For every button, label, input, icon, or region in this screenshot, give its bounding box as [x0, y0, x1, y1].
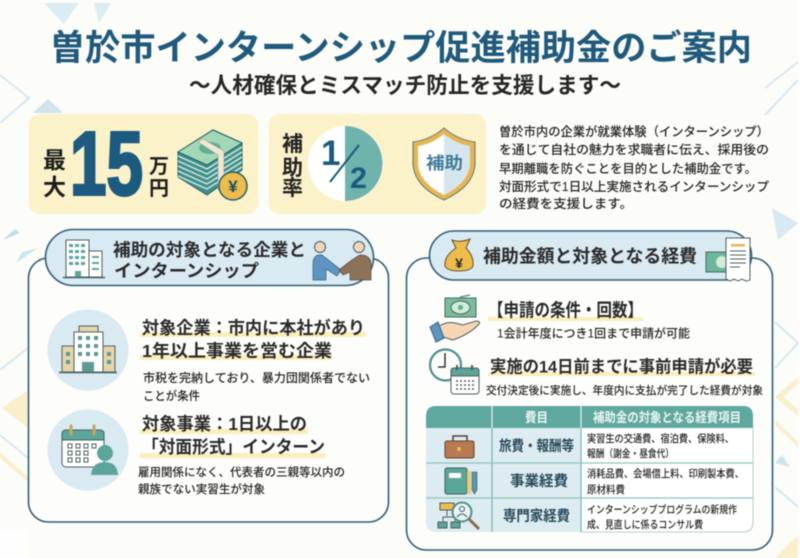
row: travel and fees: 報酬（謝金・昼食代） — [587, 447, 674, 460]
heading: 実施の14日前までに事前申請が必要 — [490, 356, 753, 376]
label: maximum — [43, 147, 66, 200]
label: maximum: 最 — [43, 147, 66, 173]
description: 雇用関係になく、代表者の三親等以内の — [138, 465, 345, 479]
description: 1会計年度につき1回まで申請が可能 — [497, 326, 690, 340]
label: maximum: 大 — [43, 174, 66, 200]
icon: banknote and receipt — [706, 238, 750, 281]
row: expert costs: 専門家経費 — [503, 507, 570, 525]
header text: 補助金額と対象となる経費 — [483, 246, 697, 266]
table: eligible expense items — [426, 406, 753, 532]
heading: 【申請の条件・回数】 — [488, 300, 643, 320]
item: eligible project — [48, 410, 345, 496]
row: project costs: 事業経費 — [510, 472, 568, 490]
chart: one half pie: 1 — [321, 134, 340, 173]
icon: money bag — [445, 239, 473, 271]
item: advance application — [430, 350, 763, 397]
chart: one half pie — [308, 126, 383, 201]
header pill — [430, 231, 752, 281]
text block: overview: を通じて自社の魅力を求職者に伝え、採用後の — [499, 142, 769, 157]
chart: one half pie: 2 — [350, 162, 367, 195]
icon: company building in circle — [48, 310, 128, 390]
icon: shield: 補助 — [426, 154, 463, 173]
icon: banknote over hand — [430, 295, 480, 342]
icon: money stack with yen coin — [178, 130, 247, 200]
unit: man-yen: 万 — [149, 156, 169, 178]
row: travel and fees — [445, 432, 734, 460]
item: eligible project: 「対面形式」インターン — [142, 437, 325, 457]
figure: 15: 15 — [70, 114, 143, 214]
subtitle: 〜人材確保とミスマッチ防止を支援します〜 — [189, 73, 621, 98]
item: application conditions — [430, 295, 690, 342]
row: project costs: 消耗品費、会場借上料、印刷製本費、 — [587, 467, 744, 480]
text block: overview — [499, 124, 770, 211]
row: travel and fees: 旅費・報酬等 — [499, 437, 574, 455]
panel: eligible companies and internships — [28, 230, 388, 522]
heading: 対象事業：1日以上の — [142, 414, 307, 434]
text block: overview: 対面形式で1日以上実施されるインターンシップ — [499, 179, 770, 194]
item: eligible company: 1年以上事業を営む企業 — [142, 341, 333, 361]
label: subsidy rate — [282, 133, 303, 200]
text block: overview: の経費を支援します。 — [499, 196, 633, 211]
description: 市税を完納しており、暴力団関係者でない — [143, 370, 370, 385]
table header: 補助金の対象となる経費項目 — [593, 410, 741, 425]
label: subsidy rate: 補 — [282, 133, 303, 156]
icon: flowchart and magnifier — [438, 502, 479, 529]
table header — [525, 410, 741, 425]
highlight bars — [140, 429, 325, 458]
icon: clock and calendar — [430, 350, 479, 394]
icon: money bag: ¥ — [455, 255, 463, 271]
item: eligible company — [48, 310, 370, 403]
icon: briefcase — [445, 436, 474, 458]
header pill — [46, 230, 374, 286]
item: eligible project: 親族でない実習生が対象 — [138, 482, 266, 496]
header pill: インターンシップ — [114, 261, 260, 281]
text block: overview: 早期離職を防ぐことを目的とした補助金です。 — [499, 161, 757, 176]
row: travel and fees: 実習生の交通費、宿泊費、保険料、 — [587, 432, 734, 445]
row: expert costs: 成、見直しに係るコンサル費 — [587, 518, 703, 531]
row: project costs: 原材料費 — [587, 483, 625, 496]
heading: 対象企業：市内に本社があり — [142, 318, 365, 338]
highlight bars — [140, 332, 366, 360]
panel: subsidy rate — [269, 114, 486, 214]
description: 交付決定後に実施し、年度内に支払が完了した経費が対象 — [486, 383, 763, 397]
table header: 費目 — [525, 410, 548, 425]
label: subsidy rate: 率 — [282, 177, 303, 200]
row: project costs — [445, 467, 744, 496]
unit: man-yen: 円 — [149, 178, 169, 200]
row: expert costs: インターンシッププログラムの新規作 — [587, 503, 737, 516]
label: subsidy rate: 助 — [282, 157, 303, 180]
icon: office building — [63, 240, 105, 278]
icon: shield — [413, 128, 475, 200]
item: eligible company: ことが条件 — [143, 388, 200, 403]
title: 曽於市インターンシップ促進補助金のご案内 — [50, 29, 752, 68]
icon: handshake — [313, 242, 371, 280]
panel: subsidy amount and expenses — [406, 231, 772, 550]
header text: 補助の対象となる企業と — [113, 240, 306, 260]
icon: calendar and person in circle — [48, 410, 128, 490]
icon: money stack with yen coin: ¥ — [228, 177, 238, 196]
icon: notebooks and pen — [445, 468, 477, 494]
text block: overview: 曽於市内の企業が就業体験（インターンシップ） — [499, 124, 769, 139]
unit: man-yen — [149, 156, 169, 200]
row: expert costs — [438, 502, 737, 531]
panel: maximum amount — [29, 114, 258, 214]
